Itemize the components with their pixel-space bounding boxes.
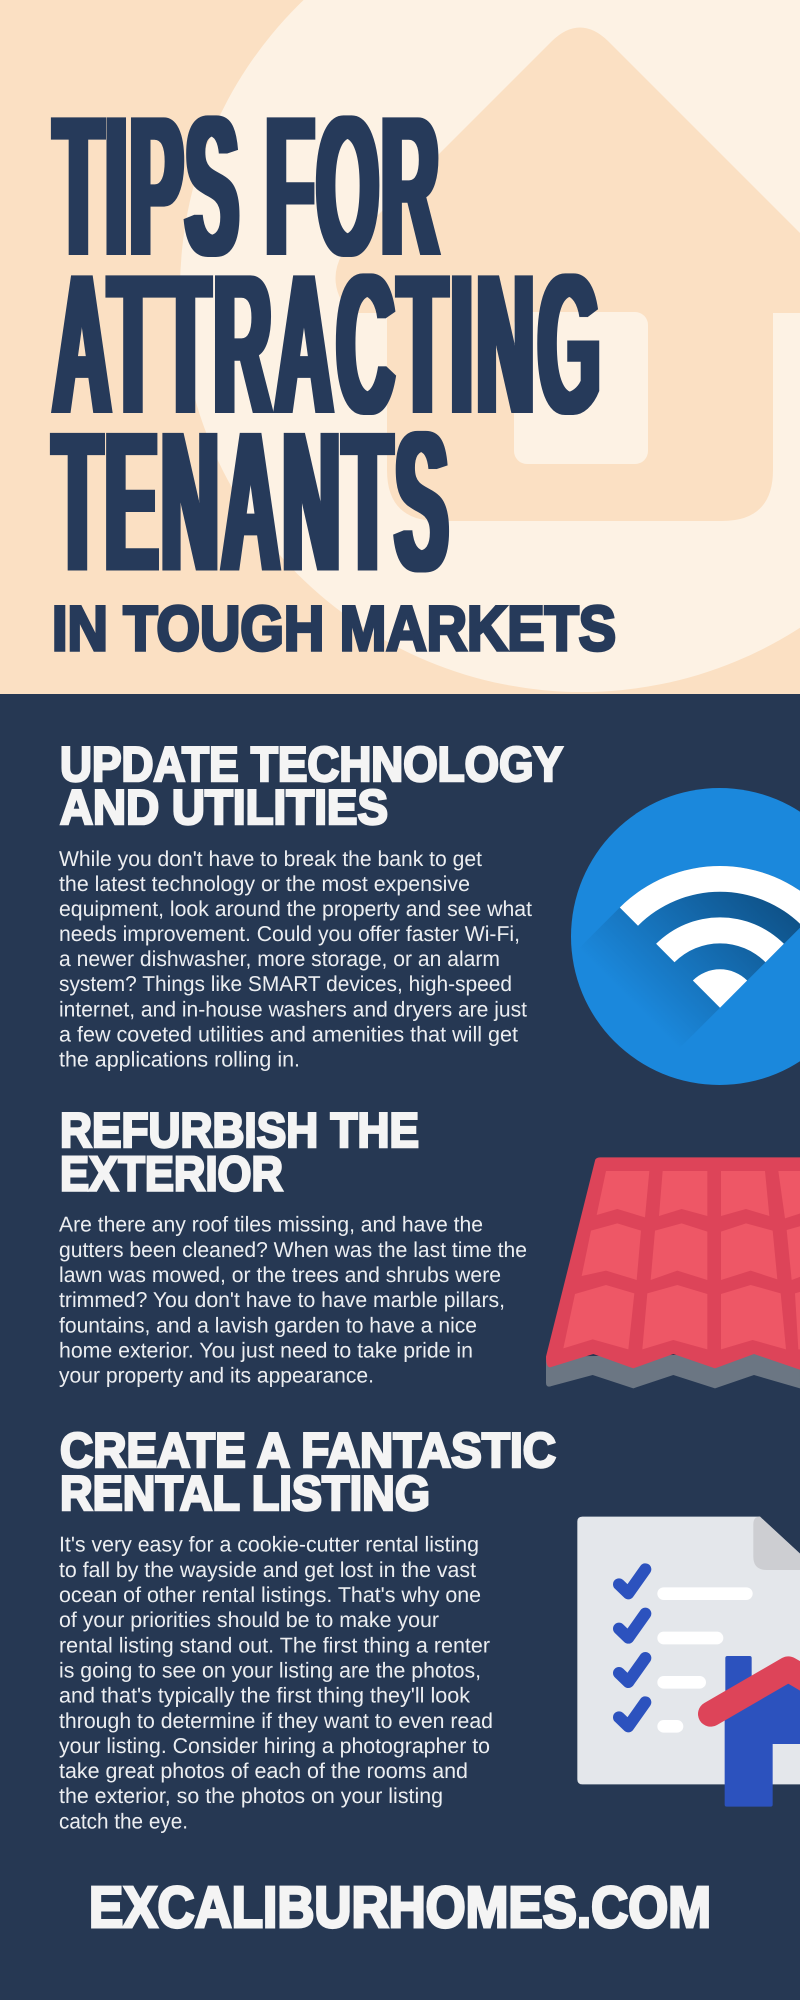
main title: TENANTS [53,390,448,614]
background circle [180,0,800,692]
text block: update technology: internet, and in-house washers and dryers are just [59,997,527,1021]
heading: update technology: UPDATE TECHNOLOGY [60,738,563,792]
text block: create a fantastic rental listing: the exterior, so the photos on your listing [59,1784,443,1808]
folded corner [753,1517,800,1570]
checklist lines [657,1587,753,1733]
text block: update technology: equipment, look around the property and see what [59,897,532,921]
main title: TIPS FOR [54,75,439,298]
icon: wifi [571,788,800,1085]
text block: update technology: the latest technology or the most expensive [59,872,470,896]
text block: refurbish the exterior: your property and its appearance. [59,1364,374,1388]
text block: refurbish the exterior [59,1213,527,1388]
heading: create a fantastic rental listing: CREATE A FANTASTIC [60,1424,556,1478]
house body [725,1656,800,1807]
text block: update technology: needs improvement. Could you offer faster Wi-Fi, [59,922,520,946]
icon: roof tiles [546,1157,800,1388]
document sheet [577,1517,800,1784]
text block: refurbish the exterior: fountains, and a lavish garden to have a nice [59,1313,477,1337]
main title: ATTRACTING [53,233,600,456]
text block: refurbish the exterior: lawn was mowed, or the trees and shrubs were [59,1263,501,1287]
heading: refurbish the exterior [60,1104,419,1202]
text block: create a fantastic rental listing: take great photos of each of the rooms and [59,1759,468,1783]
text block: create a fantastic rental listing: It's very easy for a cookie-cutter rental listing [59,1533,479,1557]
house roof [711,1669,800,1714]
footer website: EXCALIBURHOMES.COM [89,1875,711,1940]
dark content panel [0,694,800,2000]
text block: create a fantastic rental listing: is going to see on your listing are the photos, [59,1658,481,1682]
header background [0,0,800,694]
text block: update technology [59,847,532,1072]
text block: refurbish the exterior: Are there any roof tiles missing, and have the [59,1213,483,1237]
text block: create a fantastic rental listing: rental listing stand out. The first thing a renter [59,1633,490,1657]
text block: create a fantastic rental listing: of your priorities should be to make your [59,1608,439,1632]
text block: create a fantastic rental listing [59,1533,493,1833]
text block: create a fantastic rental listing: ocean of other rental listings. That's why one [59,1583,481,1607]
text block: create a fantastic rental listing: catch the eye. [59,1809,188,1833]
heading: update technology [60,738,563,835]
text block: refurbish the exterior: trimmed? You don't have to have marble pillars, [59,1288,505,1312]
text block: create a fantastic rental listing: and that's typically the first thing they'll look [59,1684,470,1708]
checkmarks [619,1569,645,1726]
text block: create a fantastic rental listing: your listing. Consider hiring a photographer to [59,1734,490,1758]
icon: rental listing document with house [577,1517,800,1807]
text block: update technology: a few coveted utilities and amenities that will get [59,1022,518,1046]
heading: update technology: AND UTILITIES [60,781,388,835]
text block: update technology: While you don't have to break the bank to get [59,847,482,871]
background house icon [335,28,800,521]
main title [53,75,600,614]
text block: refurbish the exterior: home exterior. You just need to take pride in [59,1338,473,1362]
text block: update technology: the applications rolling in. [59,1048,300,1072]
text block: refurbish the exterior: gutters been cleaned? When was the last time the [59,1238,527,1262]
heading: refurbish the exterior: EXTERIOR [60,1148,283,1202]
text block: create a fantastic rental listing: through to determine if they want to even read [59,1709,493,1733]
text block: update technology: a newer dishwasher, more storage, or an alarm [59,947,500,971]
text block: update technology: system? Things like SMART devices, high-speed [59,972,512,996]
text block: create a fantastic rental listing: to fall by the wayside and get lost in the vast [59,1558,476,1582]
subtitle: IN TOUGH MARKETS [52,594,616,664]
heading: create a fantastic rental listing [60,1424,556,1521]
heading: create a fantastic rental listing: RENTAL LISTING [60,1467,430,1521]
heading: refurbish the exterior: REFURBISH THE [60,1104,419,1158]
